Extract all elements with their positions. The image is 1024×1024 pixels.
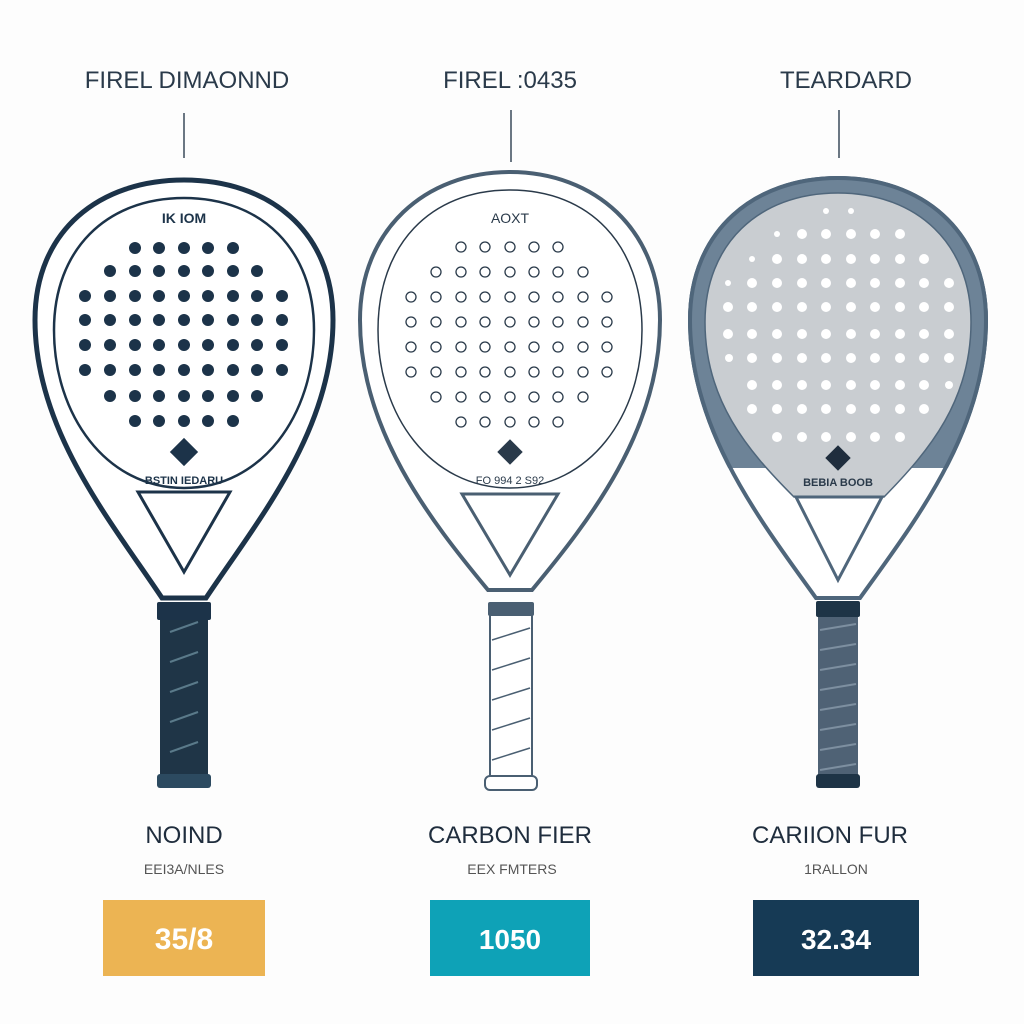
paddle 1: IK IOM [162,210,206,226]
label block 3 [752,822,919,976]
title: TEARDARD [780,67,912,158]
label block 2: CARBON FIER [428,822,592,849]
title: TEARDARD: TEARDARD [780,67,912,94]
label block 2 [428,822,592,976]
label block 1: 35/8 [155,923,213,956]
label block 3: CARIION FUR [752,822,908,849]
title: FIREL 0435 [443,67,577,162]
label block 1 [103,822,265,976]
label block 3: 1RALLON [804,861,868,877]
paddle 2: FO 994 2 S92 [476,475,544,487]
paddle 1 [35,180,333,788]
paddle 3: BEBIA BOOB [803,477,873,489]
label block 2: 1050 [479,924,541,955]
paddle 1: BSTIN IEDARU [145,475,223,487]
label block 1: NOIND [145,822,223,849]
label block 2: EEX FMTERS [467,861,557,877]
title: FIREL 0435: FIREL :0435 [443,67,577,94]
label block 1: EEI3A/NLES [144,861,224,877]
paddle 2: AOXT [491,210,530,226]
title: FIREL DIMAONND: FIREL DIMAONND [85,67,289,94]
paddle 2 [360,172,660,790]
label block 3: 32.34 [801,924,871,955]
paddle 3 [690,178,986,788]
